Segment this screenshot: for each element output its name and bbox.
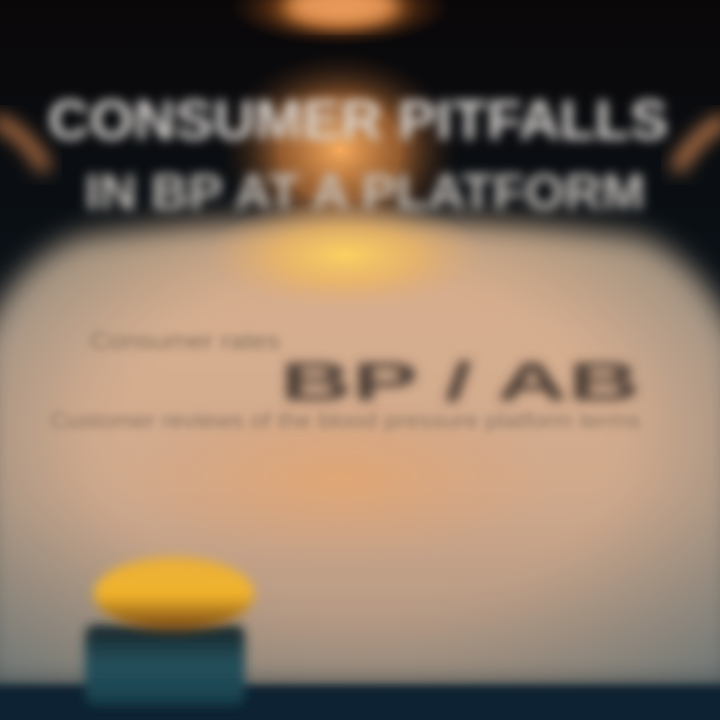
document line 1: Consumer rates xyxy=(90,328,280,355)
top lamp glow xyxy=(230,0,450,46)
document text block xyxy=(50,328,640,433)
left orange arc xyxy=(0,120,46,170)
paper panel xyxy=(0,200,720,690)
paper lower glow xyxy=(120,395,560,565)
bottom strip xyxy=(0,686,720,720)
central light glow xyxy=(220,50,460,250)
right orange arc xyxy=(676,120,720,170)
document heading: BP / AB xyxy=(280,352,640,412)
document line 2: Customer reviews of the blood pressure platform terms xyxy=(50,408,640,433)
title line 2: IN BP AT A PLATFORM xyxy=(85,164,645,220)
icon: yellow button xyxy=(85,557,254,705)
button base xyxy=(85,625,245,705)
button top xyxy=(94,557,254,631)
paper yellow highlight xyxy=(205,200,485,310)
title line 1: CONSUMER PITFALLS xyxy=(48,88,668,151)
title xyxy=(48,88,668,220)
